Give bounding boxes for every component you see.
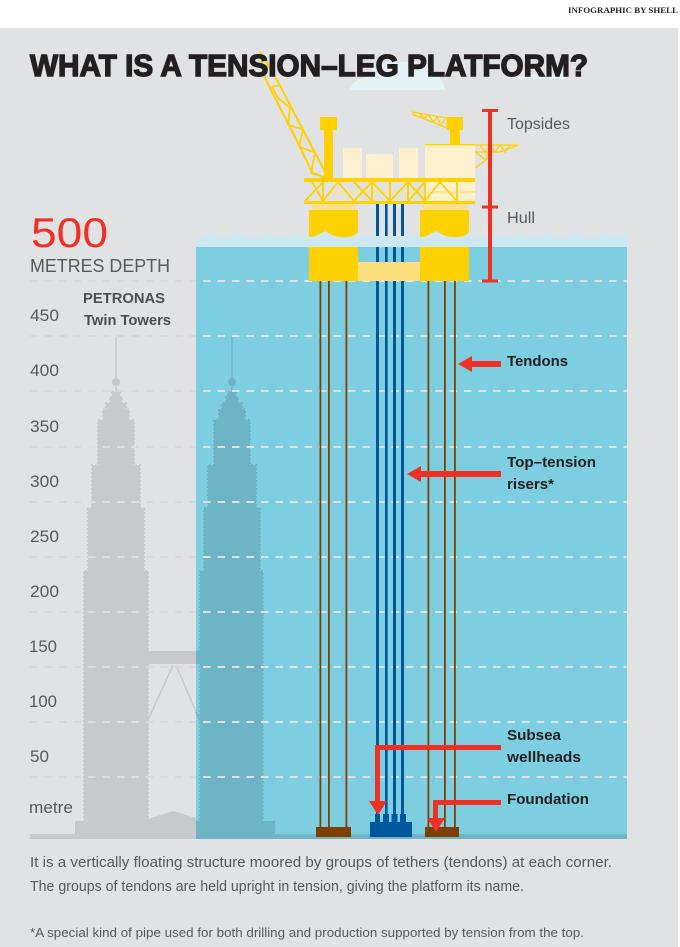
crane mast [324,130,333,178]
right column connector [423,204,467,210]
topsides and hull bracket [482,109,498,282]
250: 250 [30,528,59,546]
callout labels [506,353,596,808]
tendon 1 [320,281,321,828]
small crane mast [450,130,460,145]
tendon 6 [454,281,456,828]
flare boom [475,145,518,168]
petronas: PETRONAS [83,290,165,307]
200: 200 [30,583,59,601]
bracket cap top [482,109,498,112]
subsea label: Subsea [507,727,562,744]
foundation right [425,827,459,837]
left column upper [309,210,358,237]
subsea wellheads [370,814,412,837]
topsides label: Topsides [507,116,570,133]
module 4 [425,145,475,203]
deck top bar [304,178,475,182]
description [30,855,612,895]
left column lower [309,247,358,281]
tendon 4 [428,281,429,828]
wellhead base [370,822,412,837]
arrow: tendons [458,356,501,372]
module 1 [343,148,362,178]
bracket cap bottom [482,280,498,282]
spire ball [112,378,120,386]
arrow: top-tension risers [407,466,501,482]
small crane [412,112,463,145]
350: 350 [30,418,59,436]
module 4 top edge [425,144,475,145]
left Petronas tower [75,337,196,839]
light deck band [330,191,475,193]
right Petronas tower [196,337,275,839]
seabed [196,834,627,839]
metre: metre [29,799,73,817]
450: 450 [30,307,59,325]
skybridge legs [196,712,201,722]
small cloud [513,74,565,79]
podium hump [148,811,196,824]
main crane [260,52,325,178]
hull [309,204,469,281]
footnote: *A special kind of pipe used for both drilling and production supported by tension from the top. [30,925,584,940]
description line 2: The groups of tendons are held upright in tension, giving the platform its name. [30,879,524,895]
depth subheading: METRES DEPTH [30,256,170,276]
tower body [84,392,148,821]
pontoon [358,262,420,281]
riser 3 [393,204,396,822]
400: 400 [30,362,59,380]
skybridge legs [148,665,196,720]
sea gridlines [203,281,627,777]
credit line: INFOGRAPHIC BY SHELL [568,6,678,15]
crane cap [320,117,337,130]
wellheads label: wellheads [506,749,581,766]
deck truss [304,178,475,204]
module 2 [366,154,393,178]
300: 300 [30,473,59,491]
depth heading: 500 [31,209,108,256]
skybridge [148,651,196,664]
wellhead nubs [375,814,406,822]
main crane column [320,117,337,178]
description line 1: It is a vertically floating structure moored by groups of tethers (tendons) at each corner. [30,855,612,871]
gridlines over left tower [88,447,146,777]
hull label: Hull [507,210,535,227]
tendons label: Tendons [507,353,568,370]
tendons [320,281,456,828]
boom struts [272,85,324,177]
arrow: subsea wellheads [369,745,501,815]
cloud [350,62,445,90]
left gridlines [30,281,196,777]
spire [231,337,233,392]
depth gridlines [30,281,627,777]
tower label [83,290,171,329]
50: 50 [30,748,49,766]
foundation label: Foundation [507,791,589,808]
sea [196,247,627,839]
water overlay at surface [358,236,420,247]
small crane boom [412,112,447,128]
right column upper [420,210,469,237]
tower podium [196,821,275,839]
depth axis labels [29,307,73,817]
riser 1 [376,204,379,822]
spire ball [228,378,236,386]
riser 4 [401,204,404,822]
left column connector [312,204,355,210]
risers label: risers* [507,476,554,493]
riser 2 [385,204,388,822]
150: 150 [29,638,57,656]
twin towers: Twin Towers [84,312,171,329]
top-tension label: Top–tension [507,454,596,471]
sea surface [196,232,627,247]
small crane cap [447,117,463,130]
title: WHAT IS A TENSION–LEG PLATFORM? [30,48,588,83]
topside modules [343,145,475,203]
ground [30,834,196,839]
bracket cap middle [482,206,498,208]
100: 100 [29,693,57,711]
tendon 3 [346,281,347,828]
tendon 5 [444,281,446,828]
boom chords [260,52,325,178]
spire [115,337,117,392]
risers [376,204,404,822]
bracket stem [488,110,492,281]
arrow: foundation [427,800,501,832]
module 3 [399,148,418,178]
tower body [200,392,263,821]
right column lower [420,247,469,281]
deck bottom bar [304,201,475,204]
truss members [305,182,457,201]
tendon 2 [328,281,330,828]
foundation left [316,827,351,837]
tower podium [75,821,196,839]
skybridge [196,651,201,664]
